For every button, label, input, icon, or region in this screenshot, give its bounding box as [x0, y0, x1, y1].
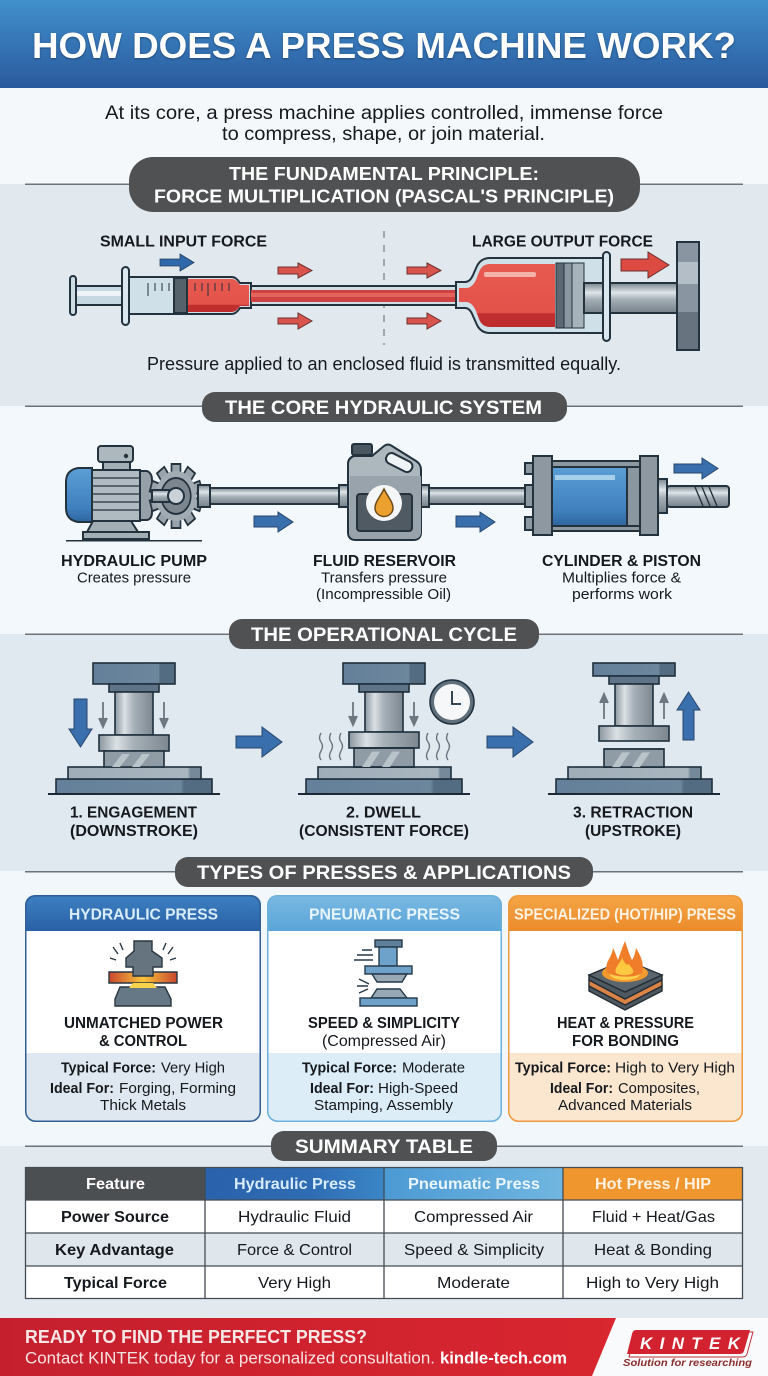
icon: heated layers [589, 941, 662, 1010]
label: small input force: SMALL INPUT FORCE [100, 234, 267, 250]
arrow: step 2 to 3 [487, 727, 533, 757]
label: cylinder and piston: performs work [572, 587, 673, 603]
label: cylinder and piston [542, 553, 701, 603]
heading: summary table [271, 1131, 497, 1161]
panel: force multiplication diagram [70, 231, 699, 374]
table row: key advantage: Heat & Bonding [594, 1242, 712, 1259]
card details: Forging, Forming [119, 1081, 236, 1097]
icon: forging die [109, 941, 177, 1006]
heading: types of presses [175, 857, 593, 887]
heading: operational cycle: THE OPERATIONAL CYCLE [251, 625, 517, 646]
logo: KINTEK: Solution for researching [623, 1358, 752, 1369]
arrows: flow direction [254, 458, 718, 532]
card details: Moderate [402, 1060, 465, 1076]
table row: power source: Power Source [61, 1209, 169, 1226]
summary table [25, 1167, 743, 1299]
step 1: engagement press [48, 663, 220, 795]
footer heading: READY TO FIND THE PERFECT PRESS? [25, 1327, 367, 1347]
table header row [86, 1176, 711, 1193]
card details: Typical Force: [61, 1060, 156, 1076]
panel: operational cycle [48, 663, 720, 840]
logo: KINTEK [623, 1330, 753, 1369]
table row: key advantage: Key Advantage [55, 1242, 174, 1259]
title banner: HOW DOES A PRESS MACHINE WORK? [32, 25, 736, 66]
arrow: step 1 to 2 [236, 727, 282, 757]
card subheading: HEAT & PRESSURE [557, 1015, 694, 1032]
panel: pneumatic press card [267, 895, 502, 1122]
card subheading: FOR BONDING [572, 1033, 679, 1050]
icon: clock [430, 680, 474, 724]
label: fluid reservoir: (Incompressible Oil) [316, 587, 451, 603]
heading: core hydraulic system [202, 392, 567, 422]
card details: Very High [161, 1060, 225, 1076]
intro text: At its core, a press machine applies controlled, immense force [105, 102, 663, 124]
heading: operational cycle [229, 619, 539, 649]
table header row: Pneumatic Press [408, 1176, 540, 1193]
card details: Thick Metals [100, 1098, 186, 1114]
card details: Ideal For: [50, 1081, 114, 1097]
table header row: Feature [86, 1176, 145, 1193]
divider: dashed centre line [383, 231, 385, 345]
caption: Pressure applied to an enclosed fluid is transmitted equally. [147, 354, 621, 374]
label: large output force: LARGE OUTPUT FORCE [472, 234, 653, 250]
label: cylinder and piston: Multiplies force & [562, 570, 681, 586]
heading: summary table: SUMMARY TABLE [295, 1137, 473, 1158]
label: fluid reservoir [313, 553, 456, 603]
label: step 2: 2. DWELL [346, 804, 421, 822]
label: hydraulic pump: HYDRAULIC PUMP [61, 553, 207, 570]
footer call to action [0, 1318, 768, 1376]
label: step 2 [299, 804, 469, 840]
card details: Composites, [618, 1081, 700, 1097]
label: step 3: 3. RETRACTION [573, 804, 693, 822]
table row: power source: Hydraulic Fluid [238, 1209, 351, 1226]
table row: power source [61, 1209, 715, 1226]
card subheading [64, 1015, 223, 1050]
arrow: output direction [621, 252, 669, 278]
card heading: PNEUMATIC PRESS [309, 906, 460, 923]
table row: typical force: Very High [258, 1275, 331, 1292]
table row: typical force: Typical Force [64, 1275, 167, 1292]
label: step 1: (DOWNSTROKE) [70, 823, 198, 840]
intro text [105, 102, 663, 145]
table row: key advantage: Force & Control [237, 1242, 352, 1259]
icon: small syringe [70, 267, 251, 325]
card subheading: (Compressed Air) [322, 1033, 446, 1050]
card details [302, 1060, 465, 1114]
card subheading [308, 1015, 460, 1050]
card details: Stamping, Assembly [314, 1098, 454, 1114]
table row: key advantage: Speed & Simplicity [404, 1242, 544, 1259]
card heading: HYDRAULIC PRESS [69, 906, 218, 923]
icon: fluid reservoir [339, 444, 429, 540]
panel: specialized press card [508, 895, 743, 1122]
footer contact line: Contact KINTEK today for a personalized consultation. [25, 1348, 435, 1368]
card details: Typical Force: [515, 1060, 611, 1076]
table row: typical force: Moderate [437, 1275, 510, 1292]
card subheading [557, 1015, 694, 1050]
table row: power source: Compressed Air [414, 1209, 534, 1226]
intro text: to compress, shape, or join material. [222, 123, 545, 145]
card subheading: SPEED & SIMPLICITY [308, 1015, 460, 1032]
panel: hydraulic press card [25, 895, 261, 1122]
card details: Advanced Materials [558, 1098, 692, 1114]
heading: fundamental principle [129, 157, 640, 212]
footer contact line: kindle-tech.com [440, 1348, 567, 1368]
icon: cylinder and piston [525, 456, 729, 535]
icon: pneumatic press [354, 940, 417, 1006]
label: step 3 [573, 804, 693, 840]
heading: types of presses: TYPES OF PRESSES & APPLICATIONS [197, 863, 571, 884]
table row: typical force [64, 1275, 719, 1292]
card subheading: UNMATCHED POWER [64, 1015, 223, 1032]
card details [515, 1060, 735, 1114]
card heading: SPECIALIZED (HOT/HIP) PRESS [514, 906, 736, 923]
card details: High to Very High [615, 1060, 735, 1076]
pipes between components [210, 488, 525, 504]
card details: Ideal For: [310, 1081, 374, 1097]
step 3: retraction press [548, 663, 720, 795]
title banner [0, 0, 768, 88]
icon: hydraulic pump [66, 446, 210, 542]
label: step 2: (CONSISTENT FORCE) [299, 823, 469, 840]
label: step 1: 1. ENGAGEMENT [70, 804, 197, 822]
table header row: Hydraulic Press [234, 1176, 356, 1193]
icon: large cylinder [456, 242, 699, 350]
table row: power source: Fluid + Heat/Gas [592, 1209, 715, 1226]
card subheading: & CONTROL [99, 1033, 187, 1050]
card details [50, 1060, 236, 1114]
heading: fundamental principle: THE FUNDAMENTAL PRINCIPLE: [229, 163, 539, 184]
table header row: Hot Press / HIP [595, 1176, 711, 1193]
logo: KINTEK: KINTEK [640, 1334, 742, 1353]
heading: fundamental principle: FORCE MULTIPLICATION (PASCAL'S PRINCIPLE) [154, 186, 614, 206]
label: fluid reservoir: FLUID RESERVOIR [313, 553, 456, 570]
card details: Typical Force: [302, 1060, 397, 1076]
label: step 1 [70, 804, 198, 840]
label: fluid reservoir: Transfers pressure [321, 570, 447, 586]
label: cylinder and piston: CYLINDER & PISTON [542, 553, 701, 570]
label: hydraulic pump: Creates pressure [77, 570, 191, 586]
arrows: pressure transmitted [278, 263, 441, 329]
label: step 3: (UPSTROKE) [585, 823, 681, 840]
label: hydraulic pump [61, 553, 207, 586]
step 2: dwell press [298, 663, 474, 795]
table row: typical force: High to Very High [586, 1275, 719, 1292]
panel: core hydraulic system [61, 444, 729, 603]
card details: High-Speed [378, 1081, 458, 1097]
card details: Ideal For: [550, 1081, 613, 1097]
table row: key advantage [55, 1242, 712, 1259]
heading: core hydraulic system: THE CORE HYDRAULIC SYSTEM [225, 398, 542, 419]
tube: connecting fluid line [251, 286, 456, 305]
arrow: input direction [160, 254, 194, 271]
